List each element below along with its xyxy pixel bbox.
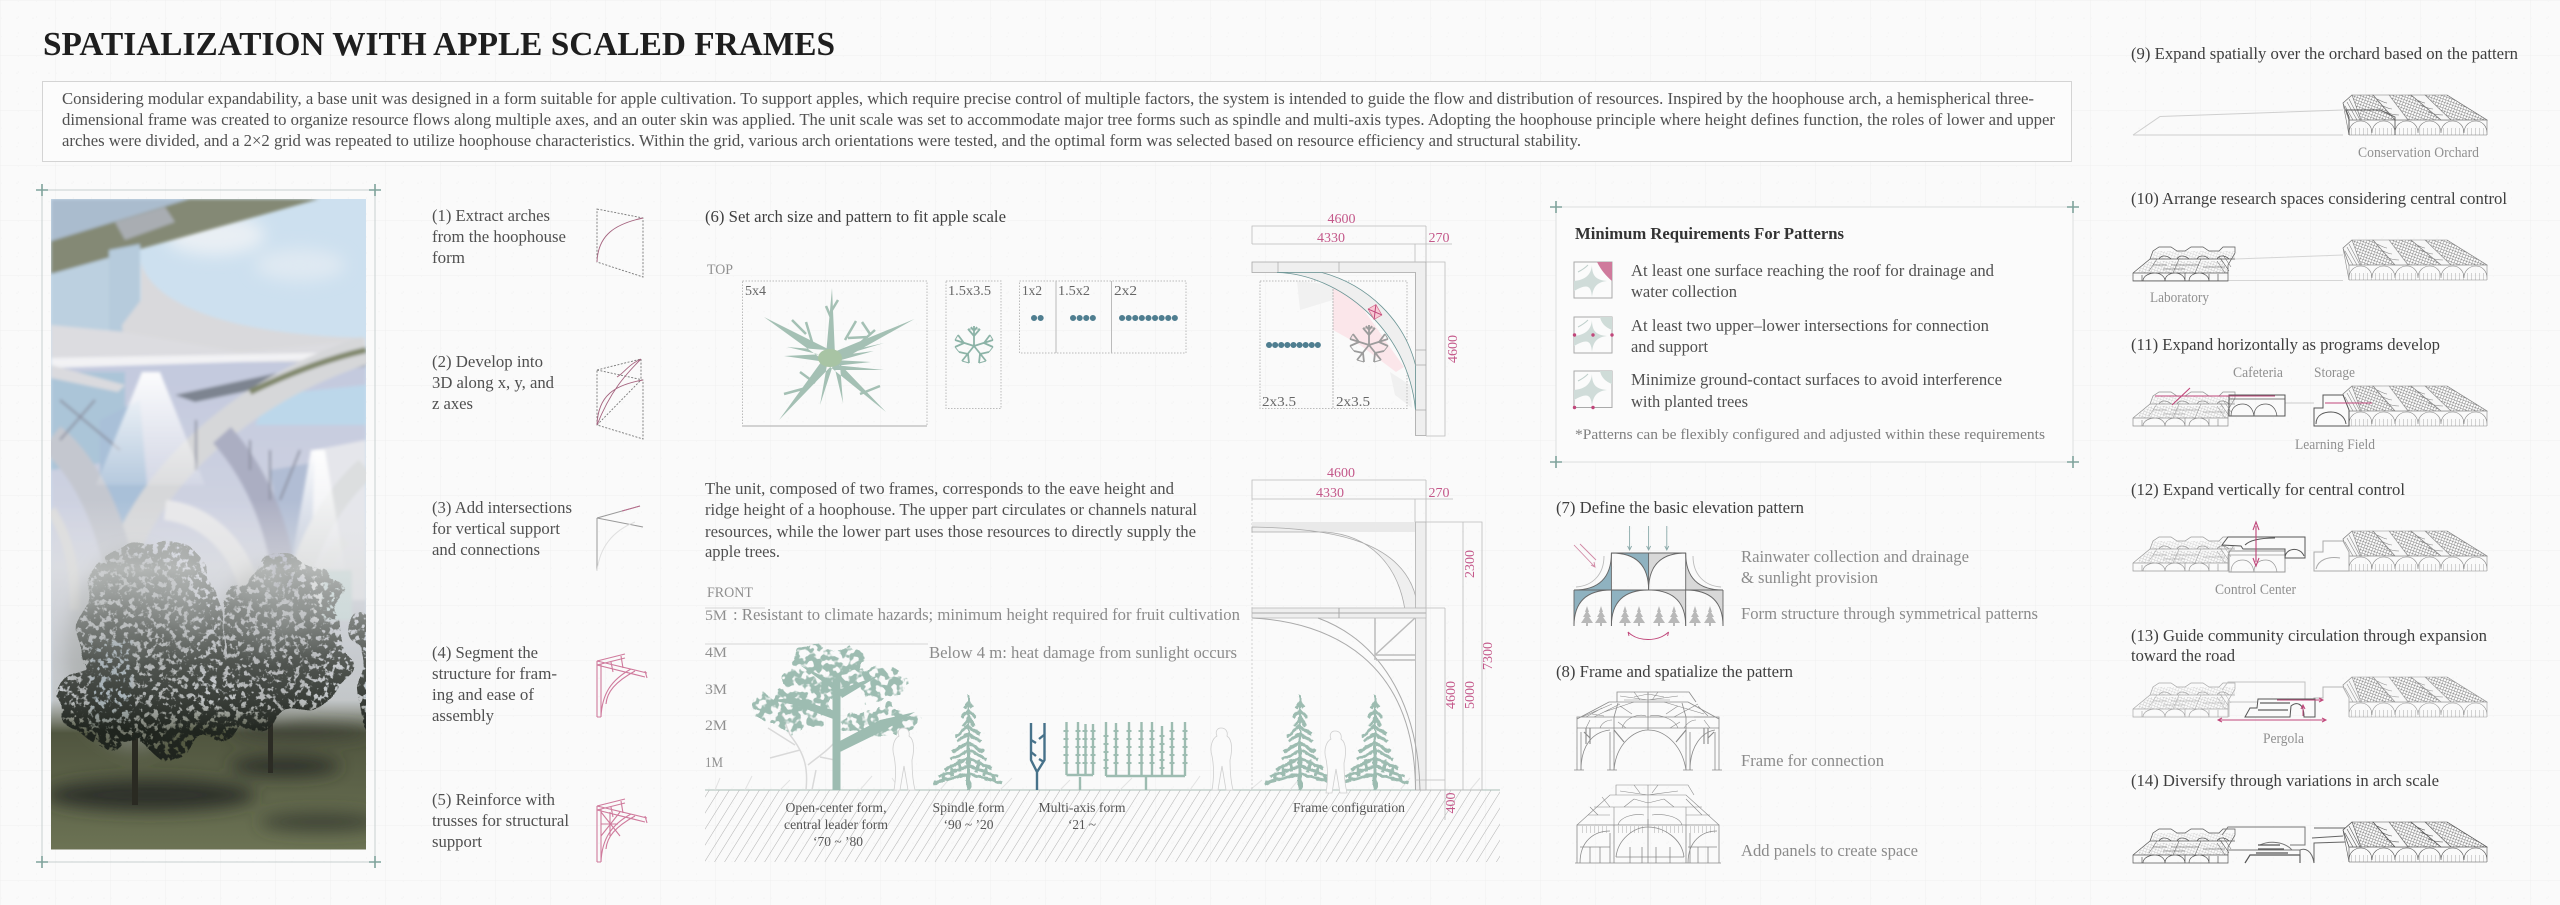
requirement 1 xyxy=(1574,261,1995,301)
front section: arch frame with dimensions xyxy=(1252,466,1496,820)
step 12: vertical expansion xyxy=(2131,480,2487,598)
step 5: reinforce with trusses: trusses for structural xyxy=(432,811,569,830)
tree rows 1x2, 1.5x2, 2x2: 1.5x2 xyxy=(1058,284,1090,299)
step 13: community circulation: (13) Guide community circulation through expansion xyxy=(2131,626,2487,645)
step 2: develop into 3D: 3D along x, y, and xyxy=(432,373,555,392)
step 12: vertical expansion: Control Center xyxy=(2215,582,2296,598)
tree rows 1x2, 1.5x2, 2x2: 2x2 xyxy=(1114,284,1137,299)
plan view: arch frame with dimensions: 2x3.5 xyxy=(1262,395,1296,410)
icon: intersection lines xyxy=(597,506,643,571)
ghost tree outline xyxy=(768,710,840,790)
spindle tree xyxy=(934,695,1002,790)
step 3: add intersections: (3) Add intersections xyxy=(432,498,572,517)
heading 8: (8) Frame and spatialize the pattern xyxy=(1556,662,1793,681)
step 4: segment structure: assembly xyxy=(432,706,495,725)
front section: arch frame with dimensions: 5000 xyxy=(1463,681,1478,709)
plan view: tree spacing boxes xyxy=(707,262,1186,426)
tree 1.5x3.5: 1.5x3.5 xyxy=(948,284,991,299)
front section: height scale and notes: : Resistant to climate hazards; minimum height required for fruit cultivation xyxy=(733,605,1240,624)
step 11: horizontal expansion xyxy=(2131,335,2487,453)
front section: arch frame with dimensions: 7300 xyxy=(1481,642,1496,670)
front section: height scale and notes: Below 4 m: heat damage from sunlight occurs xyxy=(929,643,1237,662)
step 5: reinforce with trusses: (5) Reinforce with xyxy=(432,790,556,809)
heading 6: (6) Set arch size and pattern to fit apple scale xyxy=(705,207,1006,226)
step 11: horizontal expansion: Learning Field xyxy=(2295,437,2376,453)
front section: arch frame with dimensions: 270 xyxy=(1428,486,1450,501)
requirement 2 xyxy=(1574,316,1989,356)
step 13: community circulation xyxy=(2131,626,2487,747)
step 4: segment structure: (4) Segment the xyxy=(432,643,538,662)
title: SPATIALIZATION WITH APPLE SCALED FRAMES xyxy=(43,26,835,63)
text: unit description xyxy=(705,479,1197,561)
tree form labels: ‘70 ~ ’80 xyxy=(813,835,863,850)
icon: pink segmented frame xyxy=(597,654,647,717)
arrows: rain, sun and circulation xyxy=(1574,526,1721,640)
requirement 1: At least one surface reaching the roof for drainage and xyxy=(1631,261,1995,280)
step 10: research spaces: (10) Arrange research spaces considering central control xyxy=(2131,189,2507,208)
open-center tree xyxy=(752,645,920,790)
step 14: arch scale variation xyxy=(2131,771,2487,863)
step 11: horizontal expansion: (11) Expand horizontally as programs develop xyxy=(2131,335,2440,354)
text: unit description: resources, while the lower part uses those resources to directly supply the xyxy=(705,522,1196,541)
plan view: arch frame with dimensions xyxy=(1252,212,1461,436)
front section: arch frame with dimensions: 4600 xyxy=(1327,466,1355,481)
step 4: segment structure: ing and ease of xyxy=(432,685,535,704)
tree 5x4 xyxy=(742,281,927,426)
tree rows 1x2, 1.5x2, 2x2 xyxy=(1020,281,1186,353)
step 2: develop into 3D xyxy=(432,352,643,439)
front section: height scale and notes: 5M xyxy=(705,608,727,624)
front section: height scale and notes: 1M xyxy=(705,755,723,771)
step 1: extract arches: from the hoophouse xyxy=(432,227,566,246)
step 3: add intersections xyxy=(432,498,643,571)
text: unit description: The unit, composed of two frames, corresponds to the eave height and xyxy=(705,479,1175,498)
step 13: community circulation: toward the road xyxy=(2131,646,2236,665)
front section: arch frame with dimensions: 2300 xyxy=(1463,550,1478,578)
tree form labels: Spindle form xyxy=(932,801,1005,816)
plan view: arch frame with dimensions: 4600 xyxy=(1328,212,1356,227)
step 4: segment structure xyxy=(432,643,647,725)
front section: height scale and notes: 3M xyxy=(705,682,727,698)
plan view: arch frame with dimensions: 270 xyxy=(1428,231,1450,246)
step 4: segment structure: structure for fram- xyxy=(432,664,557,683)
step 1: extract arches xyxy=(432,206,643,277)
diagram: panels to create space: Add panels to create space xyxy=(1741,841,1918,860)
requirement 3 xyxy=(1574,370,2002,411)
requirement 3: Minimize ground-contact surfaces to avoid interference xyxy=(1631,370,2002,389)
multi-axis trees xyxy=(1031,722,1185,790)
intro text box: Considering modular expandability, a base unit was designed in a form suitable for apple cultivation. To support apples, which require precise control of multiple factors, the system is intended to guide the flow and distribution of resources. Inspired by the hoophouse arch, a hemispherical three- xyxy=(62,89,2034,108)
front section: height scale and notes: 4M xyxy=(705,645,727,661)
front section: height scale and notes xyxy=(705,585,1240,771)
panel: minimum requirements for patterns: *Patterns can be flexibly configured and adjusted within these requirements xyxy=(1575,427,2045,443)
step 2: develop into 3D: z axes xyxy=(432,394,473,413)
step 10: research spaces: Laboratory xyxy=(2150,290,2210,306)
front section: height scale and notes: FRONT xyxy=(707,585,753,601)
icon: pink frame with truss xyxy=(597,799,647,862)
diagram: basic elevation pattern xyxy=(1574,526,2038,640)
tree form labels: Open-center form, xyxy=(786,801,886,816)
step 13: community circulation: Pergola xyxy=(2263,731,2305,747)
diagram: frame for connection xyxy=(1574,692,1884,770)
intro text box: dimensional frame was created to organize resource flows along multiple axes, and an outer skin was applied. The unit scale was set to accommodate major tree forms such as spindle and multi-axis types. Adopting the hoophouse principle where height defines function, the roles of lower and upper xyxy=(62,110,2056,129)
step 1: extract arches: form xyxy=(432,248,465,267)
human figure xyxy=(1211,728,1233,790)
front section: arch frame with dimensions: 4600 xyxy=(1444,681,1459,709)
plan view: tree spacing boxes: TOP xyxy=(707,262,733,278)
plan view: arch frame with dimensions: 4600 xyxy=(1446,335,1461,363)
tree form labels: ‘21 ~ xyxy=(1068,818,1096,833)
tree 1.5x3.5 xyxy=(946,281,1001,408)
tree form labels: central leader form xyxy=(784,818,888,833)
step 9: expand over the orchard: (9) Expand spatially over the orchard based on the pattern xyxy=(2131,44,2518,63)
tree 5x4: 5x4 xyxy=(745,284,766,299)
step 3: add intersections: and connections xyxy=(432,540,540,559)
photo: arched frames above apple trees xyxy=(45,199,388,850)
step 5: reinforce with trusses: support xyxy=(432,832,482,851)
requirement 2: and support xyxy=(1631,337,1708,356)
diagram: panels to create space xyxy=(1575,785,1918,863)
step 10: research spaces xyxy=(2131,189,2507,306)
tree rows 1x2, 1.5x2, 2x2: 1x2 xyxy=(1022,284,1042,299)
text: unit description: apple trees. xyxy=(705,542,780,561)
intro text box: arches were divided, and a 2×2 grid was repeated to utilize hoophouse characteristics. Within the grid, various arch orientations were tested, and the optimal form was selected based on resource efficiency and structural stability. xyxy=(62,131,1581,150)
icon: arch in plane xyxy=(597,209,643,277)
step 12: vertical expansion: (12) Expand vertically for central control xyxy=(2131,480,2405,499)
tree form labels: Multi-axis form xyxy=(1038,801,1126,816)
requirement 3: with planted trees xyxy=(1631,392,1748,411)
step 14: arch scale variation: (14) Diversify through variations in arch scale xyxy=(2131,771,2439,790)
plan view: arch frame with dimensions: 2x3.5 xyxy=(1336,395,1370,410)
requirement 1: water collection xyxy=(1631,282,1737,301)
step 1: extract arches: (1) Extract arches xyxy=(432,206,550,225)
panel: minimum requirements for patterns xyxy=(1550,201,2079,468)
diagram: basic elevation pattern: Rainwater collection and drainage xyxy=(1741,547,1969,566)
requirement 2: At least two upper–lower intersections for connection xyxy=(1631,316,1989,335)
frame configuration trees and human xyxy=(1265,695,1409,793)
icon: 3D arch xyxy=(597,359,643,439)
intro text box xyxy=(42,82,2072,162)
front section: arch frame with dimensions: 4330 xyxy=(1316,486,1344,501)
step 11: horizontal expansion: Cafeteria xyxy=(2233,365,2284,381)
ground hatch xyxy=(705,776,1500,862)
heading 7: (7) Define the basic elevation pattern xyxy=(1556,498,1804,517)
diagram: basic elevation pattern: Form structure through symmetrical patterns xyxy=(1741,604,2038,623)
step 5: reinforce with trusses xyxy=(432,790,647,862)
step 3: add intersections: for vertical support xyxy=(432,519,560,538)
step 11: horizontal expansion: Storage xyxy=(2314,365,2355,381)
text: unit description: ridge height of a hoophouse. The upper part circulates or channels natural xyxy=(705,500,1197,519)
tree form labels: Frame configuration xyxy=(1293,801,1405,816)
plan view: arch frame with dimensions: 4330 xyxy=(1317,231,1345,246)
step 9: expand over the orchard xyxy=(2131,44,2518,161)
step 2: develop into 3D: (2) Develop into xyxy=(432,352,543,371)
diagram: basic elevation pattern: & sunlight provision xyxy=(1741,568,1878,587)
tree form labels xyxy=(784,801,1405,850)
panel: render frame corners xyxy=(36,184,381,868)
tree form labels: ‘90 ~ ’20 xyxy=(944,818,994,833)
diagram: frame for connection: Frame for connection xyxy=(1741,751,1884,770)
step 9: expand over the orchard: Conservation Orchard xyxy=(2358,145,2480,161)
panel: minimum requirements for patterns: Minimum Requirements For Patterns xyxy=(1575,224,1845,243)
human figure xyxy=(893,728,915,790)
front section: height scale and notes: 2M xyxy=(705,718,727,734)
front section: arch frame with dimensions: 400 xyxy=(1444,792,1459,814)
